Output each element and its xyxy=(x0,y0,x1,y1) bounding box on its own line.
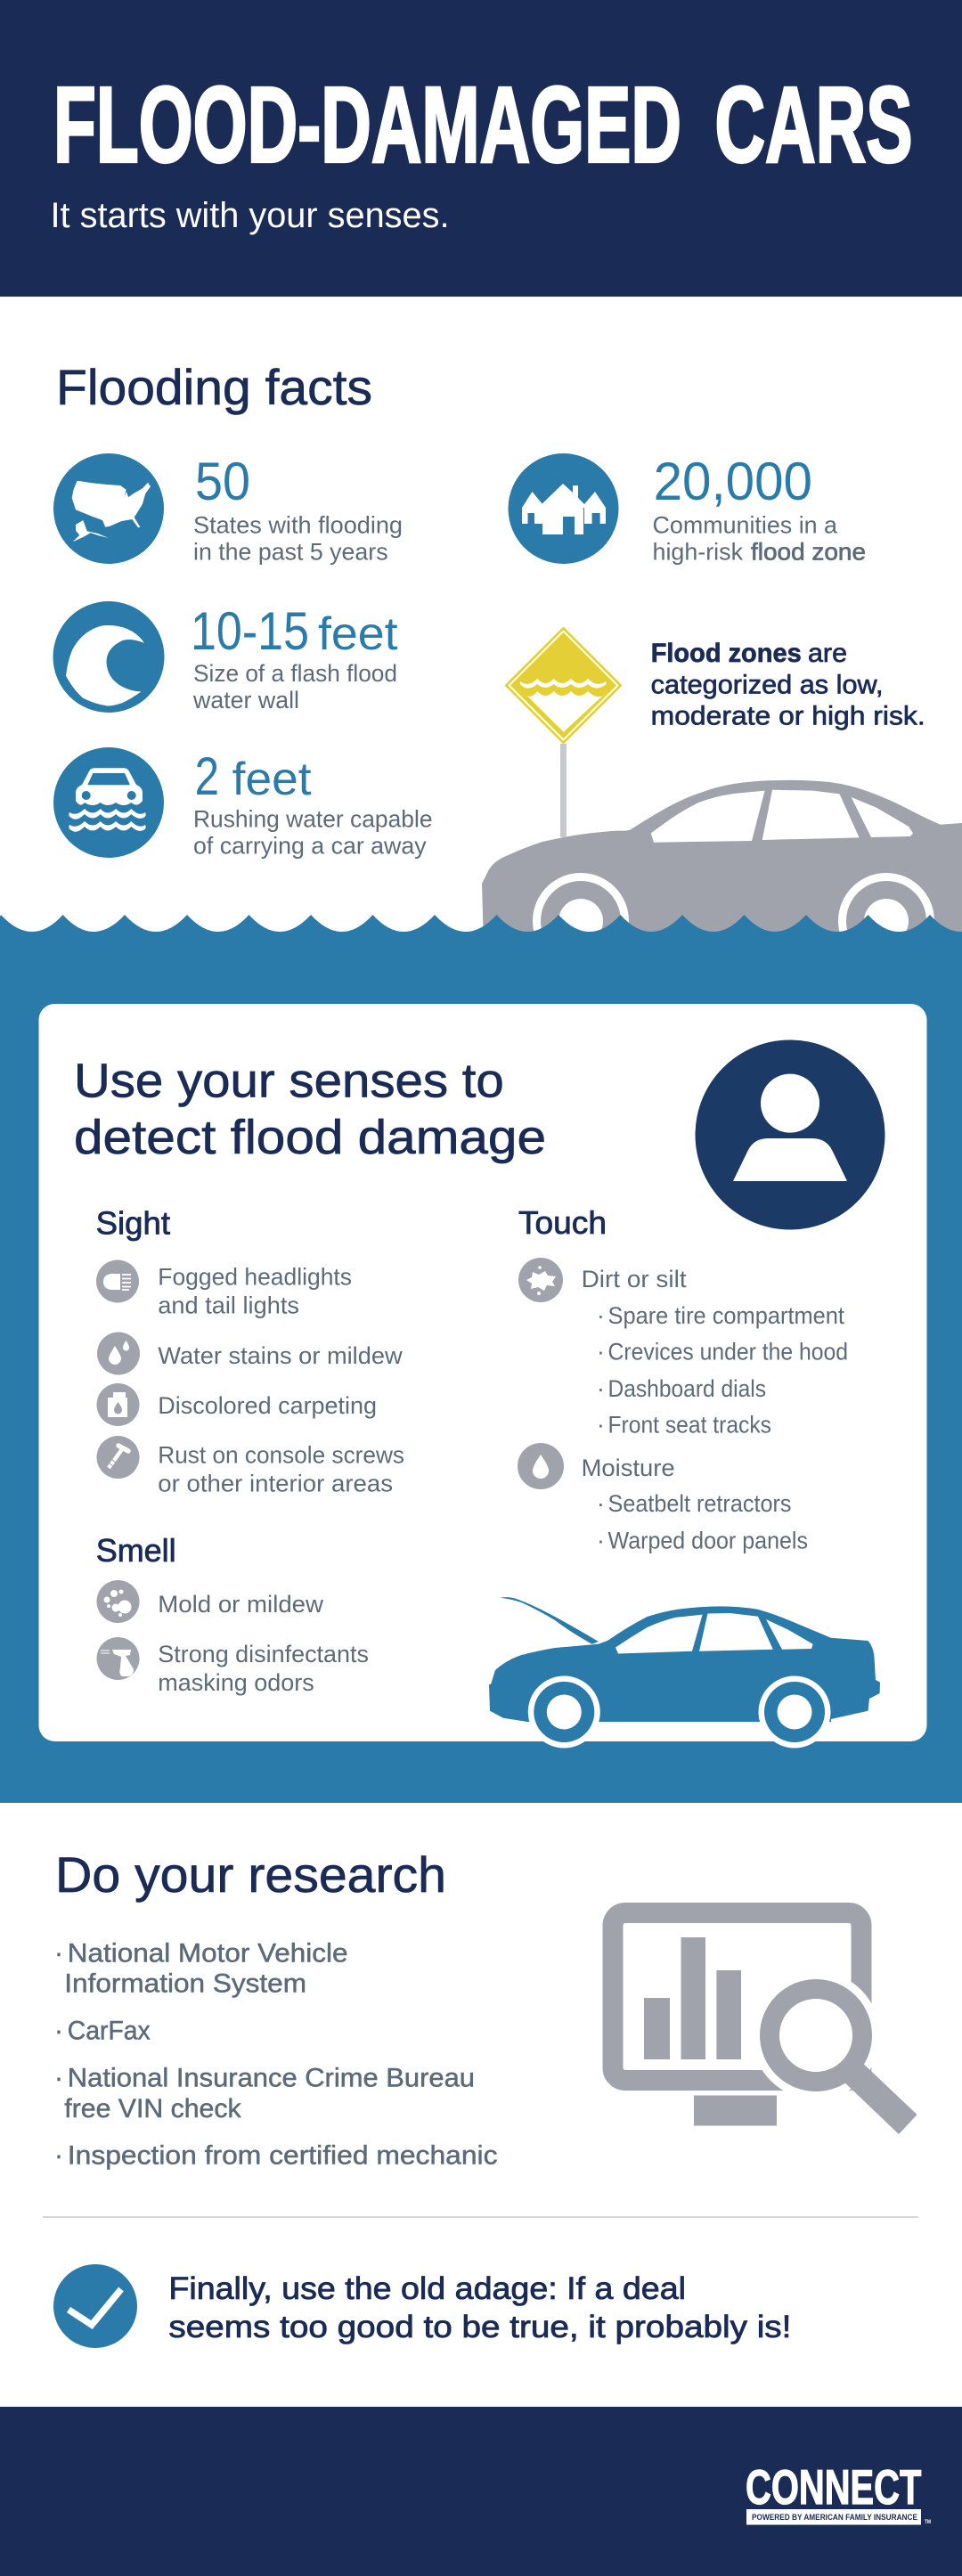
callout: flood zones: moderate or high risk. xyxy=(651,702,925,731)
fact: 10-15 feet: 10-15 xyxy=(191,601,309,661)
illustration: blue car with open hood xyxy=(489,1597,880,1748)
sight item: headlights: and tail lights xyxy=(158,1292,299,1319)
fact: 50 states xyxy=(53,452,403,566)
closing tip: seems too good to be true, it probably is! xyxy=(168,2310,791,2344)
touch item: moisture: Warped door panels xyxy=(607,1528,808,1554)
touch item: dirt or silt: Dirt or silt xyxy=(582,1266,687,1292)
smell heading: Smell xyxy=(96,1532,176,1569)
icon: flood zone road sign xyxy=(506,629,620,837)
research list: · xyxy=(54,2017,63,2045)
touch item: moisture: · xyxy=(597,1490,605,1517)
research list: CarFax xyxy=(68,2017,151,2045)
touch item: dirt or silt: Crevices under the hood xyxy=(607,1338,848,1365)
sight item: rust screw: Rust on console screws xyxy=(158,1441,404,1468)
fact: 10-15 feet: Size of a flash flood xyxy=(193,660,397,687)
smell item: spray bottle: masking odors xyxy=(158,1669,314,1696)
fact: 10-15 feet xyxy=(53,601,398,713)
heading: detect flood damage xyxy=(74,1111,546,1164)
callout: flood zones: are xyxy=(808,639,847,668)
touch heading: Touch xyxy=(518,1204,607,1241)
fact: 2 feet: 2 xyxy=(195,746,219,806)
closing tip: Finally, use the old adage: If a deal xyxy=(168,2271,686,2306)
header band xyxy=(0,0,962,297)
panel: use your senses xyxy=(39,1004,926,1748)
sight item: headlights xyxy=(96,1259,352,1319)
fact: 50 states: in the past 5 years xyxy=(193,539,388,566)
research list: Information System xyxy=(64,1969,306,1999)
smell item: spray bottle xyxy=(96,1637,369,1696)
icon: houses xyxy=(508,453,618,564)
callout: flood zones: Flood zones xyxy=(651,639,802,668)
smell item: spray bottle: Strong disinfectants xyxy=(158,1641,369,1667)
divider xyxy=(43,2216,918,2218)
sight item: carpeting xyxy=(96,1383,377,1426)
touch item: moisture xyxy=(518,1443,808,1554)
fact: 50 states: 50 xyxy=(195,452,250,511)
fact: 20,000 communities: 20,000 xyxy=(654,452,812,511)
fact: 10-15 feet: feet xyxy=(318,608,398,660)
icon: check mark xyxy=(53,2264,137,2348)
heading: do your research: Do your research xyxy=(55,1846,446,1903)
touch item: dirt or silt: Front seat tracks xyxy=(607,1411,771,1438)
heading: Use your senses to xyxy=(74,1054,504,1107)
research list: · xyxy=(54,2141,63,2171)
research list xyxy=(54,1938,497,2171)
touch item: dirt or silt: Spare tire compartment xyxy=(607,1302,845,1329)
research list: National Insurance Crime Bureau xyxy=(68,2064,475,2093)
fact: 20,000 communities: Communities in a xyxy=(652,512,838,539)
touch item: dirt or silt: · xyxy=(597,1375,605,1402)
touch item: dirt or silt: · xyxy=(597,1302,605,1329)
research list: Inspection from certified mechanic xyxy=(68,2141,498,2171)
callout: flood zones xyxy=(651,639,925,731)
icon: car in water xyxy=(53,747,164,858)
icon: person xyxy=(695,1040,885,1229)
touch item: moisture: Seatbelt retractors xyxy=(607,1490,791,1517)
sight item: rust screw xyxy=(96,1436,404,1496)
touch item: moisture: · xyxy=(597,1528,605,1554)
touch item: moisture: Moisture xyxy=(582,1455,675,1481)
footer band xyxy=(0,2407,962,2576)
illustration: grey flooded car xyxy=(482,780,962,969)
smell item: mold xyxy=(96,1580,324,1623)
subtitle: It starts with your senses. xyxy=(50,196,449,235)
heading: flooding facts: Flooding facts xyxy=(56,359,372,415)
fact: 2 feet: of carrying a car away xyxy=(193,833,427,860)
sight item: rust screw: or other interior areas xyxy=(158,1470,393,1496)
fact: 10-15 feet: water wall xyxy=(192,687,299,713)
closing tip xyxy=(53,2264,791,2348)
fact: 2 feet: Rushing water capable xyxy=(193,806,433,833)
fact: 20,000 communities xyxy=(508,452,866,565)
fact: 50 states: States with flooding xyxy=(193,512,403,539)
research list: National Motor Vehicle xyxy=(68,1938,348,1969)
sight item: water stains xyxy=(97,1333,404,1375)
logo: connect: POWERED BY AMERICAN FAMILY INSURANCE xyxy=(752,2513,917,2523)
sight item: headlights: Fogged headlights xyxy=(158,1264,352,1291)
heading xyxy=(74,1054,546,1164)
touch item: dirt or silt: · xyxy=(597,1338,605,1365)
research list: free VIN check xyxy=(64,2094,242,2124)
research list: · xyxy=(54,2064,63,2093)
touch item: dirt or silt: · xyxy=(597,1411,605,1438)
icon: US map xyxy=(53,453,164,564)
fact: 20,000 communities: high-risk xyxy=(652,538,743,565)
fact: 2 feet: feet xyxy=(232,754,312,805)
smell item: mold: Mold or mildew xyxy=(158,1591,324,1618)
sight heading: Sight xyxy=(96,1205,170,1242)
touch item: dirt or silt xyxy=(518,1258,848,1438)
fact: 20,000 communities: flood zone xyxy=(751,538,866,565)
icon: monitor with magnifier xyxy=(613,1913,917,2134)
fact: 2 feet xyxy=(53,746,433,860)
sight item: water stains: Water stains or mildew xyxy=(158,1342,404,1369)
logo: connect: TM xyxy=(925,2519,931,2525)
icon: wave xyxy=(53,601,164,713)
research list: · xyxy=(54,1938,63,1969)
sight item: carpeting: Discolored carpeting xyxy=(158,1392,377,1419)
water band xyxy=(0,915,962,1803)
touch item: dirt or silt: Dashboard dials xyxy=(607,1375,766,1402)
callout: flood zones: categorized as low, xyxy=(651,670,884,700)
